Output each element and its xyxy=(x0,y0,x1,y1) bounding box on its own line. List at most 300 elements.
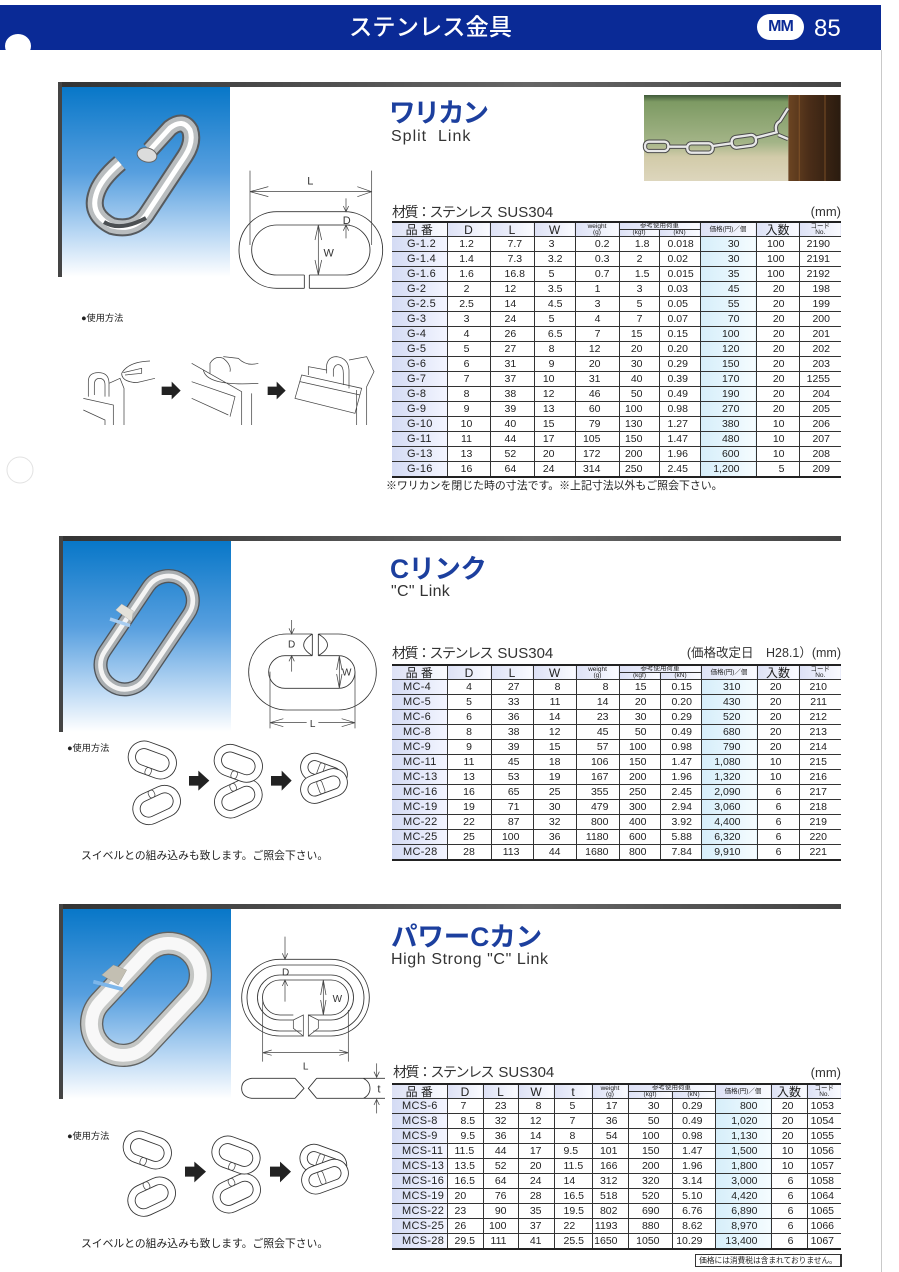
table: split link specifications: 20 xyxy=(773,298,784,310)
table: high strong C link specifications: 14 xyxy=(530,1130,542,1142)
table: split link specifications: 1.47 xyxy=(668,432,688,444)
table: C link specifications: 6,320 xyxy=(714,830,740,842)
table: C link specifications: 6 xyxy=(776,830,782,842)
heading: high strong C link: パワーCカン xyxy=(391,922,542,952)
table: split link specifications: 0.018 xyxy=(668,238,694,250)
table: split link specifications: G-1.2 xyxy=(407,238,436,250)
table: C link specifications: 0.29 xyxy=(672,710,692,722)
table: C link specifications: 28 xyxy=(463,846,475,858)
table: C link specifications: (kgf) xyxy=(633,672,646,679)
table: high strong C link specifications: 20 xyxy=(530,1160,542,1172)
table: high strong C link specifications: 111 xyxy=(491,1234,506,1246)
table: split link specifications: 20 xyxy=(543,448,554,460)
table: C link specifications: 213 xyxy=(809,726,827,738)
table: high strong C link specifications: weight xyxy=(601,1084,619,1092)
table: C link specifications: 27 xyxy=(508,680,520,692)
table: C link specifications: 1.96 xyxy=(672,770,692,782)
table: high strong C link specifications: 10 xyxy=(782,1160,794,1172)
table: C link specifications: 71 xyxy=(508,800,520,812)
table: split link specifications: 55 xyxy=(728,298,740,310)
table: split link specifications: 2190 xyxy=(807,238,830,250)
table: high strong C link specifications: 90 xyxy=(495,1204,506,1216)
table: split link specifications: 380 xyxy=(722,418,740,430)
table: C link specifications: 430 xyxy=(723,696,740,708)
table: high strong C link specifications: 0.29 xyxy=(682,1100,702,1112)
table: high strong C link specifications: t xyxy=(571,1084,575,1098)
table: high strong C link specifications: MCS-19 xyxy=(402,1190,444,1202)
table: split link specifications: 3 xyxy=(549,238,554,250)
table: split link specifications: 7 xyxy=(637,312,642,324)
table: split link specifications: 参考使用荷重 xyxy=(640,222,679,229)
table: C link specifications: 45 xyxy=(508,756,520,768)
table: split link specifications: 150 xyxy=(625,432,642,444)
table: split link specifications: 2192 xyxy=(807,268,830,280)
table: split link specifications: 16 xyxy=(461,462,472,474)
table: high strong C link specifications: 800 xyxy=(740,1100,758,1112)
table: split link specifications: 38 xyxy=(504,388,516,400)
table: C link specifications: 400 xyxy=(629,816,646,828)
table: C link specifications: 221 xyxy=(809,846,827,858)
table: C link specifications: MC-22 xyxy=(403,816,438,828)
table: split link specifications: 35 xyxy=(728,268,740,280)
table: high strong C link specifications: 100 xyxy=(489,1220,506,1232)
table: C link specifications: 355 xyxy=(591,786,608,798)
tax notice box: 価格には消費税は含まれておりません。 xyxy=(699,1256,837,1265)
table: split link specifications: 12 xyxy=(543,388,554,400)
table: split link specifications: 品 番 xyxy=(406,222,433,236)
table: C link specifications: 価格(円)／個 xyxy=(711,668,747,676)
table: split link specifications: 0.20 xyxy=(668,342,688,354)
table: C link specifications: 100 xyxy=(629,740,646,752)
table: C link specifications: 3.92 xyxy=(672,816,692,828)
table: split link specifications: 12 xyxy=(504,282,516,294)
table: high strong C link specifications: 23 xyxy=(454,1204,466,1216)
table: split link specifications: 120 xyxy=(722,342,740,354)
table: C link specifications: MC-5 xyxy=(403,696,431,708)
table: C link specifications: 13 xyxy=(463,770,475,782)
table: C link specifications: 1,320 xyxy=(714,770,740,782)
table: split link specifications: 2191 xyxy=(807,252,830,264)
table: high strong C link specifications: 10.29 xyxy=(676,1234,702,1246)
table: C link specifications: MC-9 xyxy=(403,741,431,753)
table: split link specifications: 314 xyxy=(583,462,600,474)
table: high strong C link specifications: 5 xyxy=(570,1100,575,1112)
table: split link specifications: No. xyxy=(815,228,825,236)
table: split link specifications: 20 xyxy=(773,388,784,400)
table: high strong C link specifications: 166 xyxy=(600,1160,618,1172)
table: high strong C link specifications: 6 xyxy=(788,1204,794,1216)
table: C link specifications: 8 xyxy=(555,680,560,692)
table: high strong C link specifications: 36 xyxy=(495,1130,506,1142)
table: split link specifications: 0.03 xyxy=(668,282,688,294)
table: high strong C link specifications: 13.5 xyxy=(454,1160,475,1172)
diagram: high strong C link dimensions: W xyxy=(333,994,343,1005)
table: split link specifications: コード xyxy=(810,222,830,230)
table: split link specifications: G-7 xyxy=(407,373,426,385)
table: high strong C link specifications: 1056 xyxy=(811,1144,834,1156)
table: C link specifications: 2,090 xyxy=(714,786,740,798)
table: split link specifications: 0.02 xyxy=(668,252,688,264)
table: split link specifications: 20 xyxy=(773,402,784,414)
table: C link specifications: 9 xyxy=(466,740,472,752)
table: split link specifications: 50 xyxy=(631,388,642,400)
table: split link specifications: 12 xyxy=(589,342,600,354)
photo: chain on wooden post xyxy=(644,95,841,181)
table: C link specifications: 680 xyxy=(723,726,740,738)
table: C link specifications: 品 番 xyxy=(406,666,433,680)
table: high strong C link specifications: 1650 xyxy=(594,1234,618,1246)
table: split link specifications: 0.29 xyxy=(668,358,688,370)
table: C link specifications: 2.94 xyxy=(672,800,692,812)
table: split link specifications: 5 xyxy=(549,312,554,324)
table: C link specifications: 30 xyxy=(549,800,560,812)
table: C link specifications: 216 xyxy=(809,770,827,782)
table: high strong C link specifications: 14 xyxy=(564,1174,575,1186)
diagram: C link dimensions: W xyxy=(342,668,352,679)
table: C link specifications: 113 xyxy=(503,846,520,858)
table: high strong C link specifications: 1.96 xyxy=(682,1160,702,1172)
table: C link specifications: 19 xyxy=(463,800,475,812)
table: high strong C link specifications: 4,420 xyxy=(731,1190,758,1202)
table: high strong C link specifications: 1193 xyxy=(595,1220,618,1232)
table: high strong C link specifications: 25.5 xyxy=(564,1234,584,1246)
table: C link specifications: MC-28 xyxy=(403,846,438,858)
unit: split link: (mm) xyxy=(811,204,841,219)
diagram: high strong C link dimensions xyxy=(242,937,385,1113)
table: split link specifications: 9 xyxy=(549,358,554,370)
table: C link specifications: 0.98 xyxy=(672,740,692,752)
table: high strong C link specifications: 7 xyxy=(570,1114,575,1126)
table: high strong C link specifications: (g) xyxy=(606,1090,614,1098)
table: split link specifications: 46 xyxy=(589,388,600,400)
table: C link specifications xyxy=(392,664,841,861)
table: C link specifications: 4 xyxy=(466,680,472,692)
table: C link specifications: 1.47 xyxy=(672,756,692,768)
table: high strong C link specifications: 10 xyxy=(782,1144,794,1156)
table: split link specifications: L xyxy=(509,222,515,236)
table: split link specifications: 100 xyxy=(767,252,784,264)
table: split link specifications: 3.2 xyxy=(548,252,562,264)
usage label: high strong C link: ●使用方法 xyxy=(67,1131,109,1141)
usage label: split link: ●使用方法 xyxy=(81,313,123,323)
table: C link specifications: 45 xyxy=(597,726,608,738)
table: split link specifications: 4 xyxy=(464,328,469,340)
table: split link specifications: 入数 xyxy=(765,222,790,236)
table: split link specifications: (g) xyxy=(593,228,601,236)
table: C link specifications: MC-4 xyxy=(403,681,431,693)
table: split link specifications: 3.5 xyxy=(548,282,562,294)
table: C link specifications: 106 xyxy=(591,756,608,768)
table: split link specifications: 45 xyxy=(728,282,740,294)
table: high strong C link specifications: 入数 xyxy=(777,1084,801,1098)
table: high strong C link specifications: 880 xyxy=(642,1220,660,1232)
table: C link specifications: 0.49 xyxy=(672,726,692,738)
panel: high strong C link photo xyxy=(63,909,231,1099)
table: split link specifications: 10 xyxy=(543,372,554,384)
logo text: MM xyxy=(768,18,793,35)
punch hole middle xyxy=(7,457,33,483)
table: split link specifications: 60 xyxy=(589,402,600,414)
table: high strong C link specifications: 1,130 xyxy=(731,1130,758,1142)
table: C link specifications: 30 xyxy=(635,710,646,722)
table: high strong C link specifications: 54 xyxy=(606,1130,618,1142)
diagram: high strong C link dimensions: D xyxy=(282,967,289,978)
table: split link specifications: 170 xyxy=(722,372,740,384)
table: split link specifications: 44 xyxy=(504,432,516,444)
table: split link specifications: 14 xyxy=(504,298,516,310)
table: C link specifications: 1180 xyxy=(586,830,608,842)
table: C link specifications: 20 xyxy=(635,696,646,708)
table: high strong C link specifications: 8,970 xyxy=(731,1220,758,1232)
table: C link specifications: 790 xyxy=(723,740,740,752)
table: C link specifications: 20 xyxy=(770,726,782,738)
table: high strong C link specifications: 100 xyxy=(642,1130,660,1142)
table: split link specifications: 1.4 xyxy=(459,252,474,264)
table: split link specifications: 1,200 xyxy=(713,462,740,474)
table: split link specifications: 100 xyxy=(767,268,784,280)
table: C link specifications: 53 xyxy=(508,770,520,782)
table: high strong C link specifications: 32 xyxy=(495,1114,506,1126)
table: high strong C link specifications: 8.5 xyxy=(460,1114,475,1126)
table: C link specifications: (g) xyxy=(594,672,601,678)
diagram: split link dimensions: W xyxy=(323,248,334,260)
material: high strong C link: 材質：ステンレス SUS304 xyxy=(393,1064,554,1081)
table: split link specifications: 209 xyxy=(812,462,830,474)
panel: split link photo xyxy=(62,87,230,277)
table: high strong C link specifications: 1065 xyxy=(811,1204,834,1216)
table: high strong C link specifications: MCS-16 xyxy=(402,1175,444,1187)
table: C link specifications: 6 xyxy=(776,846,782,858)
table: high strong C link specifications: 3.14 xyxy=(682,1174,702,1186)
table: split link specifications: 30 xyxy=(631,358,642,370)
table: high strong C link specifications: 312 xyxy=(600,1174,618,1186)
table: split link specifications: 15 xyxy=(543,418,554,430)
table: high strong C link specifications: 16.5 xyxy=(564,1190,584,1202)
table: split link specifications: 20 xyxy=(773,372,784,384)
table: high strong C link specifications: 200 xyxy=(642,1160,660,1172)
table: C link specifications: No. xyxy=(815,672,825,678)
table: C link specifications: 0.20 xyxy=(672,696,692,708)
table: high strong C link specifications: 1053 xyxy=(811,1100,834,1112)
usage steps: high strong C link xyxy=(119,1127,352,1222)
table: split link specifications: 31 xyxy=(589,372,600,384)
panel: C link photo xyxy=(63,541,231,732)
table: high strong C link specifications: 7 xyxy=(460,1100,466,1112)
table: split link specifications: 100 xyxy=(625,402,642,414)
table: high strong C link specifications: 23 xyxy=(495,1100,506,1112)
table: split link specifications: 0.7 xyxy=(595,268,610,280)
table: split link specifications: 3 xyxy=(464,312,469,324)
table: high strong C link specifications: 20 xyxy=(782,1100,794,1112)
table: split link specifications: 5 xyxy=(549,268,554,280)
table: high strong C link specifications: MCS-13 xyxy=(402,1160,444,1172)
table: high strong C link specifications: 11.5 xyxy=(454,1144,474,1156)
table: high strong C link specifications: (kgf) xyxy=(644,1091,656,1098)
table: high strong C link specifications: 20 xyxy=(782,1114,794,1126)
table: C link specifications: 44 xyxy=(549,846,560,858)
table: C link specifications: D xyxy=(465,666,473,680)
table: high strong C link specifications: 29.5 xyxy=(454,1234,475,1246)
table: split link specifications: 7.3 xyxy=(508,252,522,264)
table: split link specifications: 205 xyxy=(812,402,830,414)
table: split link specifications: 8 xyxy=(549,342,554,354)
section 1 frame xyxy=(58,82,841,277)
table: split link specifications: 0.49 xyxy=(668,388,688,400)
table: high strong C link specifications: 1054 xyxy=(811,1114,834,1126)
table: split link specifications: 200 xyxy=(625,448,642,460)
table: split link specifications: 1.5 xyxy=(635,268,650,280)
table: high strong C link specifications: 17 xyxy=(530,1144,542,1156)
table: C link specifications: 6 xyxy=(776,786,782,798)
table: split link specifications: W xyxy=(549,222,560,236)
table: high strong C link specifications: 520 xyxy=(642,1190,660,1202)
table: high strong C link specifications: MCS-6 xyxy=(402,1100,438,1112)
table: split link specifications: G-11 xyxy=(407,433,432,445)
table: high strong C link specifications: 品 番 xyxy=(406,1084,433,1098)
table: high strong C link specifications: 1064 xyxy=(811,1190,834,1202)
table: high strong C link specifications: 6 xyxy=(788,1174,794,1186)
table: C link specifications: 6 xyxy=(776,816,782,828)
table: split link specifications: G-13 xyxy=(407,448,433,460)
table: C link specifications: 479 xyxy=(591,800,608,812)
table: split link specifications: G-1.4 xyxy=(407,253,436,265)
table: C link specifications: 10 xyxy=(770,770,782,782)
diagram: C link dimensions: D xyxy=(288,640,295,651)
table: C link specifications: 33 xyxy=(508,696,520,708)
table: high strong C link specifications: 0.98 xyxy=(682,1130,702,1142)
diagram: split link dimensions xyxy=(239,171,383,288)
table: C link specifications: 210 xyxy=(809,680,827,692)
table: split link specifications: 4.5 xyxy=(548,298,562,310)
table: split link specifications: D xyxy=(464,222,473,236)
table: high strong C link specifications: 1,500 xyxy=(731,1144,758,1156)
table: high strong C link specifications: 1050 xyxy=(636,1234,660,1246)
table: split link specifications: 0.98 xyxy=(668,402,688,414)
table: high strong C link specifications: 6 xyxy=(788,1190,794,1202)
table: split link specifications: 2 xyxy=(637,252,642,264)
table: C link specifications: コード xyxy=(810,666,830,672)
table: split link specifications: 5 xyxy=(464,342,469,354)
header band xyxy=(0,5,881,50)
table: split link specifications: 207 xyxy=(812,432,830,444)
table: split link specifications: 70 xyxy=(728,312,740,324)
table: split link specifications: 17 xyxy=(543,432,554,444)
table: C link specifications: 36 xyxy=(508,710,520,722)
table: C link specifications: 25 xyxy=(463,830,475,842)
table: split link specifications: 13 xyxy=(461,448,472,460)
table: high strong C link specifications: 19.5 xyxy=(564,1204,584,1216)
table: split link specifications: G-10 xyxy=(407,418,433,430)
table: C link specifications: 16 xyxy=(463,786,475,798)
material: split link: 材質：ステンレス SUS304 xyxy=(392,204,553,221)
table: high strong C link specifications: 26 xyxy=(454,1220,466,1232)
table: C link specifications: 167 xyxy=(591,770,608,782)
note: high strong C link swivel: スイベルとの組み込みも致します。ご照会下さい。 xyxy=(81,1238,328,1250)
table: C link specifications: 800 xyxy=(591,816,608,828)
table: split link specifications: 24 xyxy=(543,462,554,474)
table: high strong C link specifications: 101 xyxy=(600,1144,618,1156)
table: C link specifications: 200 xyxy=(629,770,646,782)
table: high strong C link specifications: 12 xyxy=(530,1114,542,1126)
table: split link specifications: G-4 xyxy=(407,328,426,340)
table: split link specifications: 190 xyxy=(722,388,740,400)
table: high strong C link specifications: 1055 xyxy=(811,1130,834,1142)
table: high strong C link specifications: 9.5 xyxy=(460,1130,475,1142)
table: split link specifications: 64 xyxy=(504,462,516,474)
table: C link specifications: 9,910 xyxy=(714,846,740,858)
table: C link specifications: 12 xyxy=(549,726,560,738)
table: high strong C link specifications: MCS-8 xyxy=(402,1115,438,1127)
table: split link specifications: 2.5 xyxy=(459,298,474,310)
table: high strong C link specifications: 1057 xyxy=(811,1160,834,1172)
table: C link specifications: 8 xyxy=(466,726,472,738)
table: split link specifications: 0.15 xyxy=(668,328,688,340)
table: split link specifications: 1.2 xyxy=(459,238,474,250)
table: high strong C link specifications: D xyxy=(461,1084,469,1098)
table: split link specifications: 199 xyxy=(812,298,830,310)
table: split link specifications: G-16 xyxy=(407,463,433,475)
table: C link specifications: MC-8 xyxy=(403,726,431,738)
table: C link specifications: 800 xyxy=(629,846,646,858)
table: C link specifications: 入数 xyxy=(766,666,790,680)
table: split link specifications: 7 xyxy=(595,328,600,340)
table: high strong C link specifications: MCS-28 xyxy=(402,1235,444,1247)
table: high strong C link specifications: 8.62 xyxy=(682,1220,702,1232)
table: split link specifications: 198 xyxy=(812,282,830,294)
table: split link specifications: 1.8 xyxy=(635,238,650,250)
table: high strong C link specifications: 価格(円)／個 xyxy=(725,1088,761,1094)
usage label: C link: ●使用方法 xyxy=(67,743,109,753)
table: C link specifications: 310 xyxy=(723,680,740,692)
table: C link specifications: 57 xyxy=(597,740,608,752)
table: split link specifications: 20 xyxy=(773,342,784,354)
table: split link specifications: 150 xyxy=(722,358,740,370)
table: split link specifications: 1255 xyxy=(807,372,830,384)
table: C link specifications: MC-13 xyxy=(403,771,438,783)
table: split link specifications: 20 xyxy=(773,282,784,294)
table: C link specifications: 220 xyxy=(809,830,827,842)
table: high strong C link specifications: 35 xyxy=(530,1204,542,1216)
table: high strong C link specifications: 6,890 xyxy=(731,1204,758,1216)
subheading: C link: "C" Link xyxy=(391,583,450,600)
logo badge xyxy=(757,14,804,40)
table: high strong C link specifications: 6 xyxy=(788,1234,794,1246)
table: C link specifications: 20 xyxy=(770,696,782,708)
table: split link specifications: 20 xyxy=(589,358,600,370)
table: high strong C link specifications: コード xyxy=(814,1084,834,1092)
usage steps: C link xyxy=(124,737,351,830)
table: C link specifications: MC-11 xyxy=(403,756,437,768)
table: split link specifications: G-9 xyxy=(407,403,426,415)
table: split link specifications: 79 xyxy=(589,418,600,430)
section 3 frame xyxy=(59,904,841,1099)
table: high strong C link specifications: 5.10 xyxy=(682,1190,702,1202)
table: C link specifications: 11 xyxy=(550,696,560,708)
table: split link specifications: 172 xyxy=(583,448,600,460)
table: split link specifications: 24 xyxy=(504,312,516,324)
table: C link specifications: 参考使用荷重 xyxy=(640,665,680,672)
table: split link specifications: 270 xyxy=(722,402,740,414)
table: split link specifications: 3 xyxy=(637,282,642,294)
table: C link specifications: weight xyxy=(588,666,607,672)
table: high strong C link specifications: MCS-9 xyxy=(402,1130,438,1142)
table: split link specifications: G-2.5 xyxy=(407,298,436,310)
table: C link specifications: 39 xyxy=(508,740,520,752)
table: high strong C link specifications: 24 xyxy=(530,1174,542,1186)
table: C link specifications: 2.45 xyxy=(672,786,692,798)
table: split link specifications: 0.39 xyxy=(668,372,688,384)
table: high strong C link specifications: 28 xyxy=(530,1190,542,1202)
